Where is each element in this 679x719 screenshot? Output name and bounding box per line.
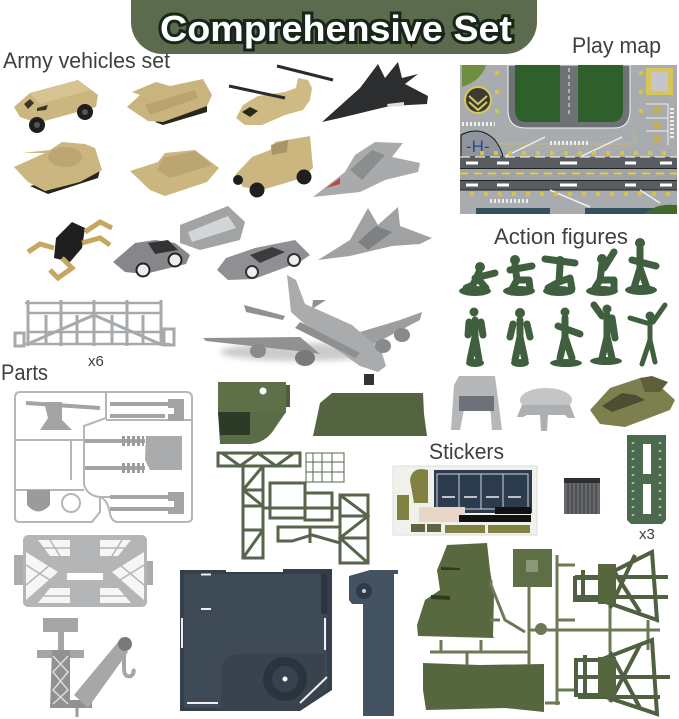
- dark building base: [180, 569, 332, 711]
- black stealth jet: [322, 62, 428, 122]
- grey jet: [318, 207, 432, 260]
- green ladder plate: [627, 435, 666, 524]
- green tent: [313, 393, 427, 436]
- label: x6: x6: [88, 353, 104, 370]
- airplane: [203, 275, 422, 385]
- label: x3: x3: [639, 526, 655, 543]
- title banner: [131, 0, 537, 54]
- row 1 soldiers: [459, 238, 657, 296]
- tan armoured car: [14, 80, 98, 133]
- heading: stickers: Stickers: [429, 439, 504, 464]
- grey weapons sprue: [15, 392, 192, 522]
- play map: -H-: [466, 137, 490, 156]
- grey arch shelter: [451, 376, 502, 430]
- grass corner and emblem: [462, 65, 486, 87]
- parking square: [646, 68, 673, 95]
- grey crane: [37, 618, 134, 717]
- gold scorpion vehicle: [28, 222, 112, 278]
- tan battle tank: [130, 150, 219, 196]
- grey jeep and trailer: [113, 206, 245, 276]
- heading: parts: Parts: [1, 360, 48, 385]
- fence: [15, 300, 174, 346]
- heading: army vehicles: Army vehicles set: [3, 48, 170, 73]
- dark column: [349, 570, 398, 716]
- heading: action figures: Action figures: [494, 224, 628, 249]
- row 2 soldiers: [466, 304, 665, 367]
- green tower sprue: [218, 453, 368, 563]
- coil of strip: [564, 478, 600, 514]
- helipad: [461, 131, 503, 157]
- tan amphibious tank: [127, 79, 212, 125]
- grey fighter jet: [313, 142, 420, 197]
- large green sprue: [417, 543, 670, 714]
- runway: [460, 157, 677, 169]
- green hangar wall: [218, 382, 290, 444]
- grey grid frame: [14, 535, 153, 607]
- tan helicopter: [229, 66, 333, 125]
- play map: [460, 65, 677, 214]
- heading: play map: Play map: [572, 33, 661, 58]
- tan armoured truck: [233, 136, 313, 198]
- grey round table: [517, 388, 575, 431]
- green inflatable boat: [590, 376, 675, 427]
- grey sports car: [217, 240, 310, 280]
- action figures: [459, 238, 665, 367]
- title banner: Comprehensive Set: [160, 8, 512, 49]
- sticker sheet: [393, 466, 537, 535]
- tan tank: [14, 142, 102, 194]
